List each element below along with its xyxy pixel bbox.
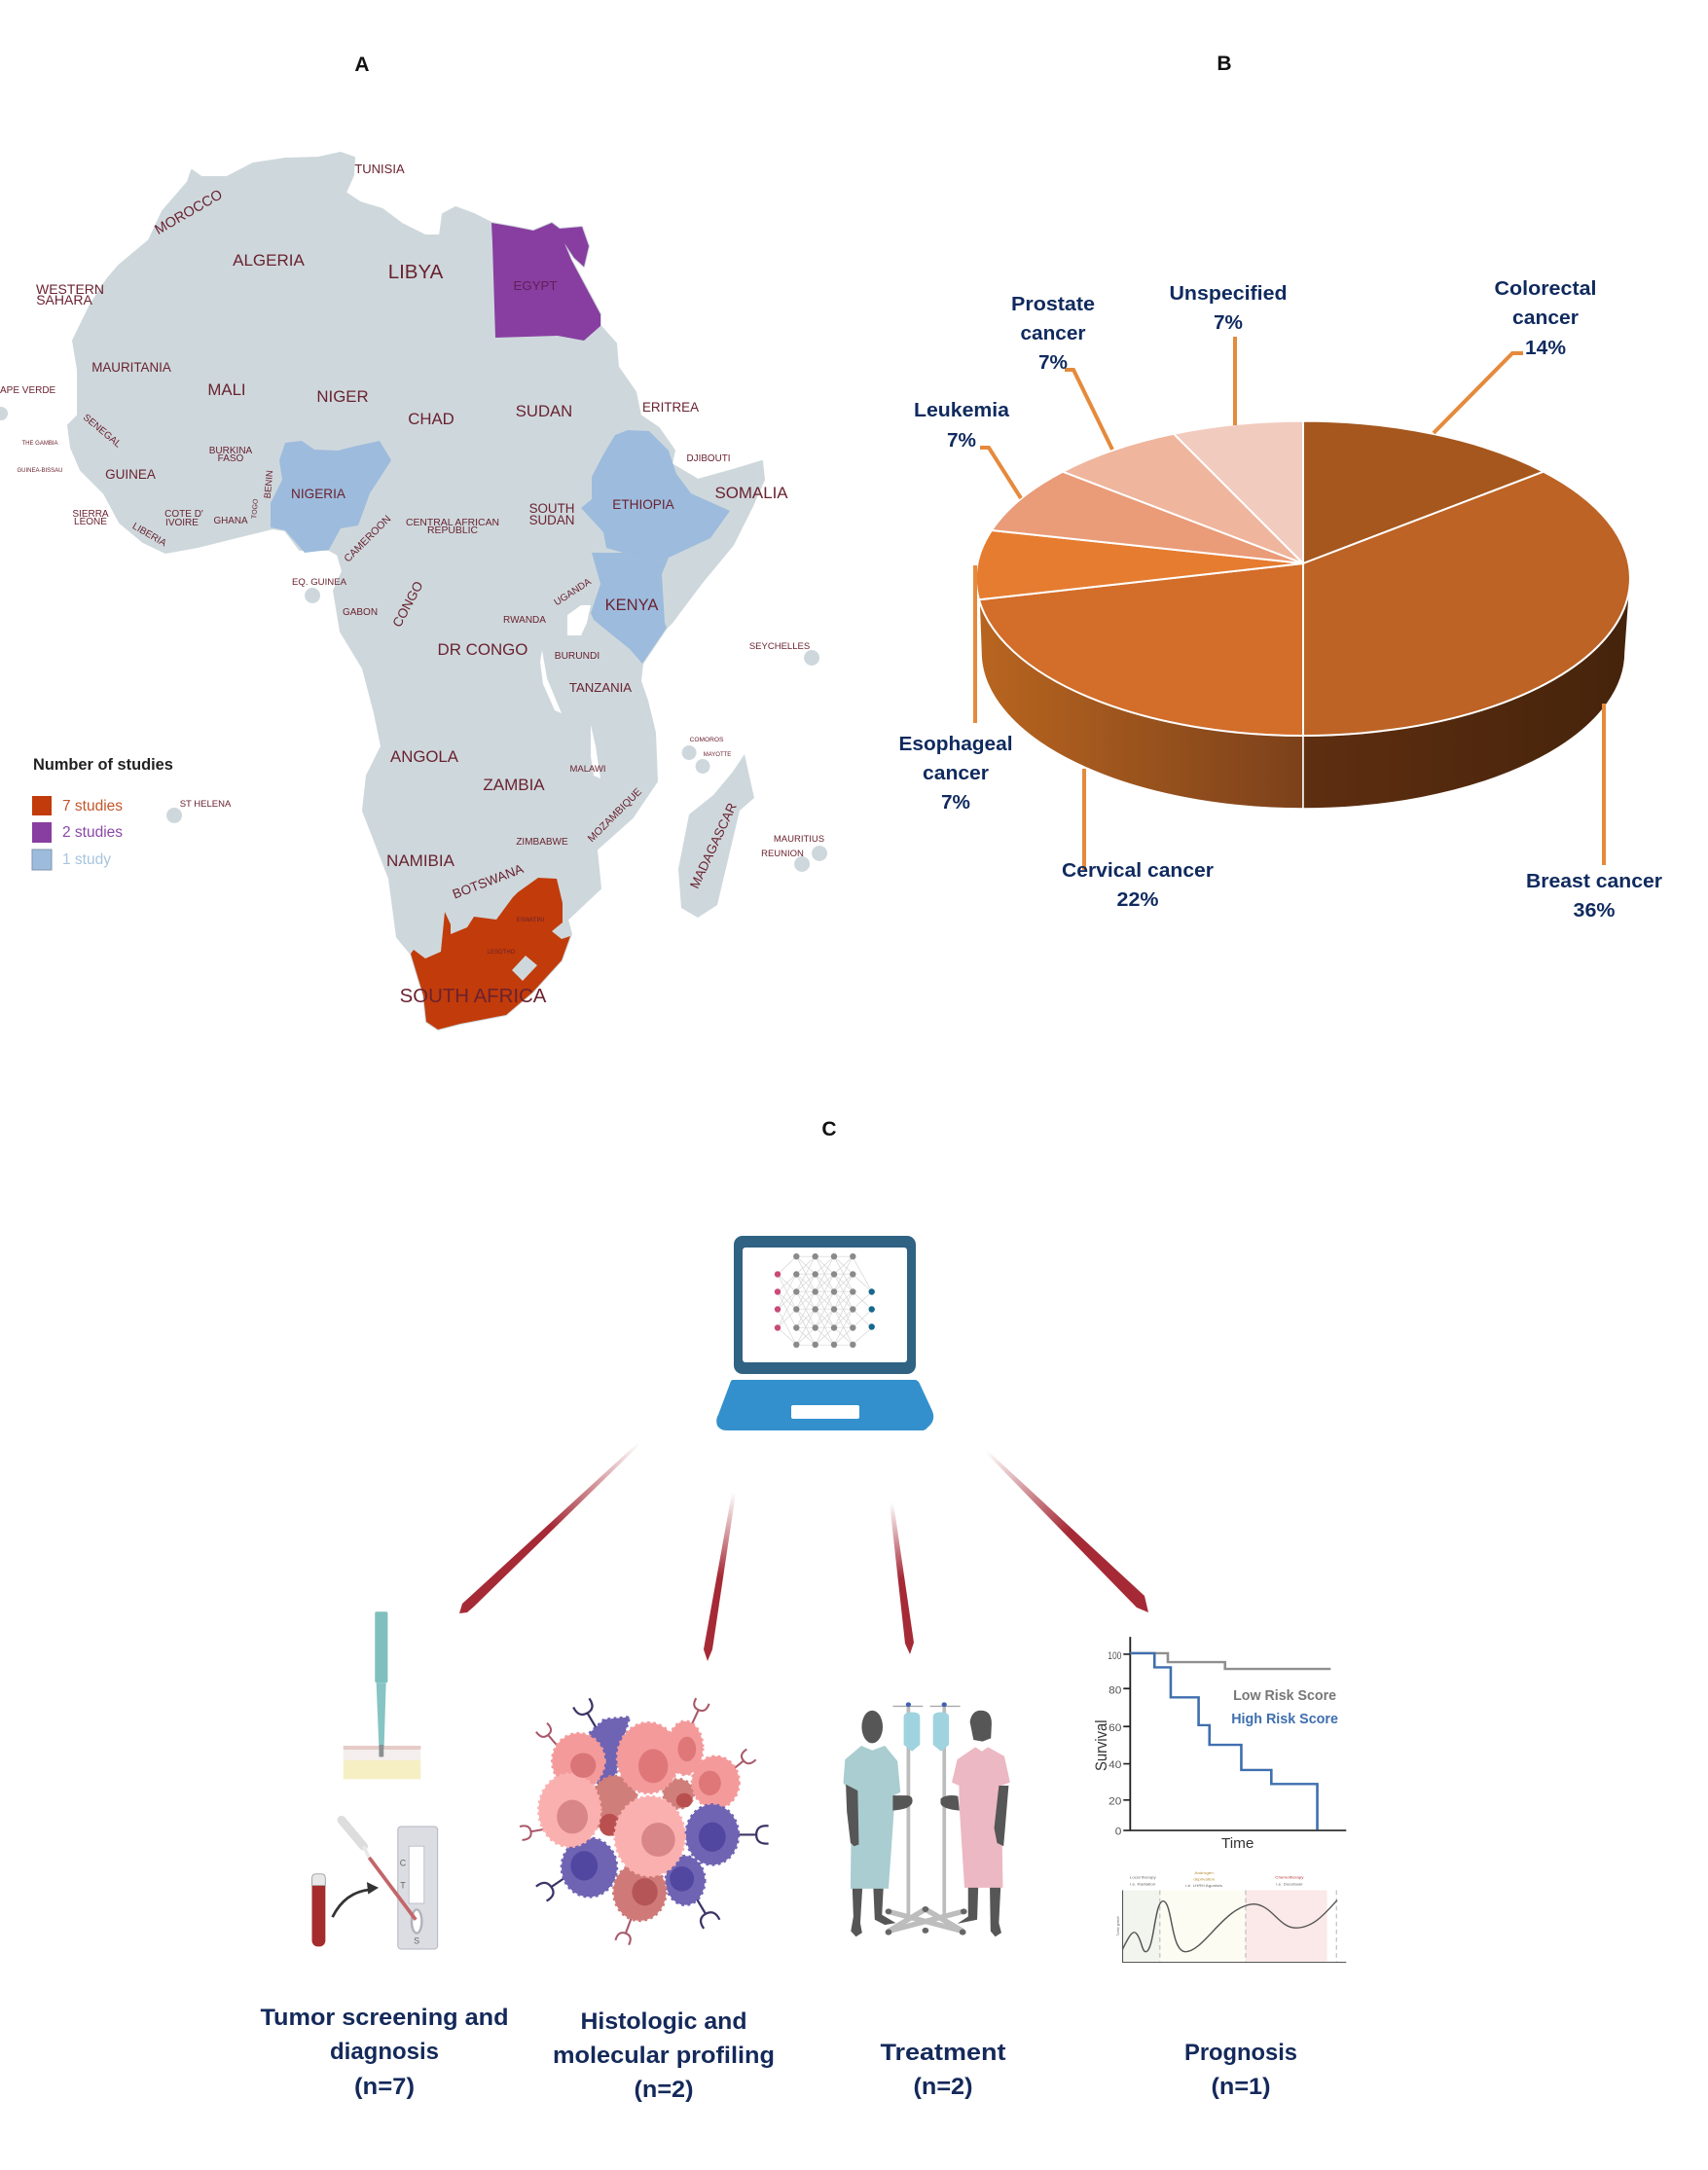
pie labels: 14%: [1525, 337, 1566, 359]
pie labels: [899, 277, 1662, 922]
country labels: SEYCHELLES: [749, 641, 810, 652]
country labels: ST HELENA: [180, 799, 232, 810]
country labels: LIBERIA: [130, 521, 168, 549]
antibodies: [520, 1698, 769, 1945]
legend: number of studies: [32, 756, 173, 870]
country: Egypt: [491, 223, 600, 341]
country labels: CENTRAL AFRICAN: [406, 518, 499, 528]
country labels: MAYOTTE: [704, 752, 731, 758]
country labels: ZAMBIA: [483, 776, 545, 794]
country: Nigeria: [271, 441, 391, 553]
country labels: COMOROS: [690, 737, 724, 743]
pie labels: Colorectal: [1495, 277, 1596, 300]
panel C: AI applications: [261, 1236, 1346, 2103]
country labels: DJIBOUTI: [687, 453, 730, 464]
pie labels: cancer: [1512, 307, 1579, 329]
country labels: BENIN: [263, 470, 275, 499]
legend: number of studies: 1 study: [62, 851, 111, 868]
chart: tumor growth by therapy phase: i.e. Docetaxel: [1276, 1882, 1302, 1886]
category labels: (n=1): [1211, 2074, 1271, 2100]
pie labels: Unspecified: [1170, 282, 1287, 305]
cell nuclei: [557, 1737, 726, 1905]
country labels: MAURITANIA: [91, 360, 171, 375]
chart: Kaplan-Meier survival curve: Time: [1221, 1836, 1254, 1852]
chart: tumor growth by therapy phase: Chemotherapy: [1275, 1875, 1304, 1879]
country labels: MOZAMBIQUE: [586, 786, 644, 845]
chart: tumor growth by therapy phase: i.e. LHRH Agonists: [1185, 1883, 1222, 1888]
category labels: (n=7): [354, 2074, 415, 2100]
country labels: [0, 162, 824, 1007]
pie labels: cancer: [923, 762, 989, 784]
country labels: MALAWI: [569, 764, 606, 775]
country labels: BURUNDI: [555, 651, 600, 662]
pie labels: 7%: [1038, 351, 1068, 374]
icon: biopsy needle and blood test: [312, 1611, 438, 1949]
legend: number of studies: 2 studies: [62, 824, 123, 841]
continent outline: [68, 153, 764, 1030]
chart: Kaplan-Meier survival curve: 20: [1108, 1796, 1121, 1807]
country labels: MOROCCO: [153, 187, 225, 238]
country labels: EQ. GUINEA: [292, 577, 347, 588]
country: Kenya: [591, 553, 669, 664]
pie labels: Esophageal: [899, 733, 1012, 755]
legend: number of studies: Number of studies: [33, 756, 173, 774]
country labels: SAHARA: [36, 292, 92, 307]
country labels: LESOTHO: [488, 950, 516, 956]
pie labels: 7%: [941, 791, 970, 814]
country labels: COTE D': [164, 509, 203, 520]
country labels: BOTSWANA: [451, 861, 526, 902]
pie labels: 36%: [1573, 899, 1616, 922]
country labels: SUDAN: [529, 513, 574, 527]
category labels: diagnosis: [330, 2039, 439, 2065]
country labels: CAMEROON: [342, 513, 393, 564]
country labels: BURKINA: [209, 446, 253, 456]
country labels: DR CONGO: [438, 640, 527, 659]
chart: tumor growth by therapy phase: Local therapy: [1130, 1875, 1157, 1879]
panel heading: B: B: [1217, 53, 1232, 75]
country labels: ZIMBABWE: [516, 837, 568, 848]
chart: Kaplan-Meier survival curve: 100: [1108, 1650, 1121, 1662]
country labels: MAURITIUS: [774, 834, 824, 845]
icon: rapid blood test: C: [400, 1859, 407, 1868]
country labels: FASO: [218, 453, 244, 464]
country labels: GABON: [343, 607, 378, 618]
country labels: NAMIBIA: [386, 851, 455, 870]
pie slices: [976, 421, 1630, 736]
blue and dark background cells: [589, 1717, 705, 1905]
country labels: NIGERIA: [291, 487, 346, 501]
country labels: ETHIOPIA: [612, 497, 675, 512]
icon: skin biopsy: [344, 1611, 420, 1779]
pie labels: Cervical cancer: [1062, 859, 1214, 882]
lakes: [540, 605, 600, 778]
pie labels: Prostate: [1011, 293, 1095, 315]
pie labels: 7%: [1214, 311, 1243, 334]
country: Ethiopia: [581, 430, 730, 564]
chart: Kaplan-Meier survival curve: High Risk Score: [1231, 1712, 1338, 1727]
country labels: LEONE: [74, 517, 107, 527]
country labels: CONGO: [389, 579, 426, 630]
country labels: TANZANIA: [569, 680, 632, 695]
country labels: TOGO: [251, 498, 260, 519]
country labels: GHANA: [213, 516, 248, 526]
chart: Kaplan-Meier survival curve: 0: [1115, 1826, 1121, 1837]
chart: Kaplan-Meier survival curve: Survival: [1093, 1719, 1110, 1771]
category labels: Tumor screening and: [261, 2005, 508, 2031]
chart: Kaplan-Meier survival curve: Low Risk Score: [1233, 1688, 1336, 1704]
country labels: SUDAN: [516, 402, 572, 420]
country labels: ESWATINI: [517, 918, 544, 923]
country labels: SOMALIA: [714, 484, 788, 502]
country labels: SOUTH: [529, 501, 574, 516]
country labels: SENEGAL: [81, 413, 124, 451]
icon: rapid blood test: T: [400, 1881, 406, 1891]
Madagascar and islands: [0, 407, 827, 918]
icon: tumor cell cluster: [520, 1698, 769, 1945]
country labels: SIERRA: [72, 509, 109, 520]
country labels: GUINEA: [105, 467, 156, 482]
country labels: ANGOLA: [390, 747, 459, 766]
country labels: LIBYA: [388, 261, 444, 283]
country labels: REPUBLIC: [427, 525, 478, 536]
woman patient: [940, 1711, 1010, 1936]
pink and blue cells: [538, 1721, 739, 1921]
category labels: Histologic and: [580, 2008, 747, 2035]
icon: rapid blood test: S: [414, 1935, 419, 1945]
country labels: EGYPT: [513, 278, 558, 293]
category labels: Treatment: [880, 2040, 1006, 2066]
category labels: Prognosis: [1184, 2040, 1297, 2066]
country labels: THE GAMBIA: [21, 441, 58, 447]
icon: patients with IV poles: [843, 1702, 1010, 1936]
chart: Kaplan-Meier survival curve: 80: [1108, 1685, 1121, 1696]
category labels: (n=2): [635, 2077, 693, 2103]
IV stands: [886, 1702, 967, 1935]
country labels: SOUTH AFRICA: [400, 986, 547, 1007]
country labels: NIGER: [316, 387, 369, 406]
arrow: to treatment: [890, 1502, 914, 1654]
chart: tumor growth by therapy phase: Tumor growth: [1116, 1916, 1120, 1936]
country labels: ERITREA: [642, 400, 699, 415]
icon: laptop with neural network: [716, 1236, 933, 1430]
panel heading: C: C: [821, 1118, 837, 1140]
pie labels: Breast cancer: [1526, 870, 1662, 892]
category labels: molecular profiling: [553, 2043, 775, 2069]
chart: tumor growth by therapy phase: Androgen: [1194, 1870, 1214, 1875]
chart: tumor growth by therapy phase: deprivation: [1193, 1877, 1216, 1881]
country labels: REUNION: [761, 849, 804, 859]
country labels: UGANDA: [553, 576, 594, 608]
chart: Kaplan-Meier survival curve: 60: [1108, 1722, 1121, 1734]
legend: number of studies: 7 studies: [62, 798, 123, 814]
country labels: RWANDA: [503, 615, 546, 626]
man patient: [843, 1711, 913, 1936]
country labels: KENYA: [605, 597, 658, 614]
chart: Kaplan-Meier survival curve: 40: [1108, 1760, 1121, 1771]
country labels: GUINEA-BISSAU: [17, 468, 63, 474]
country labels: WESTERN: [36, 281, 104, 297]
panel A: Africa map: [0, 153, 827, 1030]
pie labels: cancer: [1020, 322, 1086, 344]
panel B: 3D pie chart: [899, 277, 1662, 922]
chart: tumor growth by therapy phase: [1116, 1870, 1346, 1962]
country: South Africa: [411, 878, 570, 1030]
arrow: to screening: [459, 1442, 640, 1613]
icon: rapid blood test: [312, 1820, 438, 1949]
pie labels: 7%: [947, 429, 976, 452]
pie labels: Leukemia: [914, 399, 1010, 421]
country labels: CHAD: [408, 410, 454, 428]
chart: Kaplan-Meier survival curve: [1093, 1637, 1346, 1852]
country labels: TUNISIA: [354, 162, 405, 176]
pie side wall: [979, 584, 1630, 809]
country labels: MALI: [207, 380, 246, 399]
arrow: to profiling: [704, 1493, 736, 1661]
category labels: (n=2): [913, 2074, 973, 2100]
country labels: ALGERIA: [233, 251, 306, 270]
pie labels: 22%: [1117, 888, 1158, 911]
leader lines: [975, 337, 1604, 870]
category labels: [261, 2005, 1297, 2103]
country labels: MADAGASCAR: [687, 800, 740, 890]
arrow: to prognosis: [985, 1450, 1148, 1612]
country labels: IVOIRE: [165, 518, 199, 528]
chart: tumor growth by therapy phase: i.e. Radiation: [1130, 1882, 1156, 1886]
panel heading: A: A: [354, 54, 370, 76]
